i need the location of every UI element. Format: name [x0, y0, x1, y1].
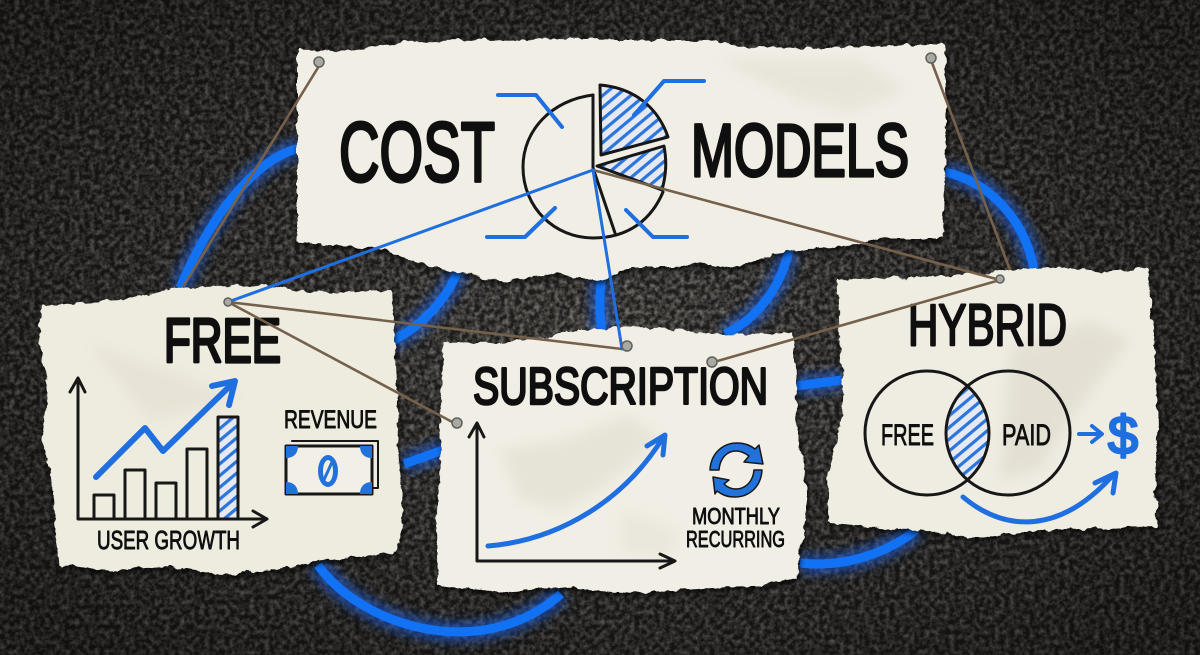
arrow: to dollar [1079, 426, 1102, 442]
heading: hybrid: HYBRID [908, 293, 1067, 358]
label: user growth: USER GROWTH [97, 525, 240, 555]
heading: free: FREE [164, 307, 281, 376]
bar chart: user growth [70, 378, 267, 527]
strings passing under the lower notes [183, 60, 1010, 287]
icon: banknote [286, 441, 378, 494]
glowing blue loop behind the notes [180, 148, 1034, 632]
label: monthly: MONTHLY [692, 503, 780, 529]
panel: cost models title note [297, 39, 946, 282]
panel: free note [39, 285, 403, 575]
pie chart [487, 81, 704, 238]
title: models: MODELS [691, 109, 909, 192]
label: paid: PAID [1002, 419, 1051, 452]
label: free: FREE [881, 419, 934, 452]
arrow: curved revenue arrow [963, 473, 1116, 522]
strings and pins [224, 53, 1004, 428]
line chart: recurring growth [469, 423, 675, 568]
label: revenue: REVENUE [284, 406, 377, 434]
icon: dollar sign: $ [1108, 406, 1138, 466]
title: cost: COST [339, 105, 495, 199]
label: recurring: RECURRING [686, 526, 785, 552]
panel: subscription note [437, 327, 807, 593]
icon: recurring cycle arrows [710, 443, 763, 497]
venn diagram: free and paid [865, 371, 1070, 495]
panel: hybrid note [827, 267, 1158, 538]
heading: subscription: SUBSCRIPTION [473, 358, 768, 416]
